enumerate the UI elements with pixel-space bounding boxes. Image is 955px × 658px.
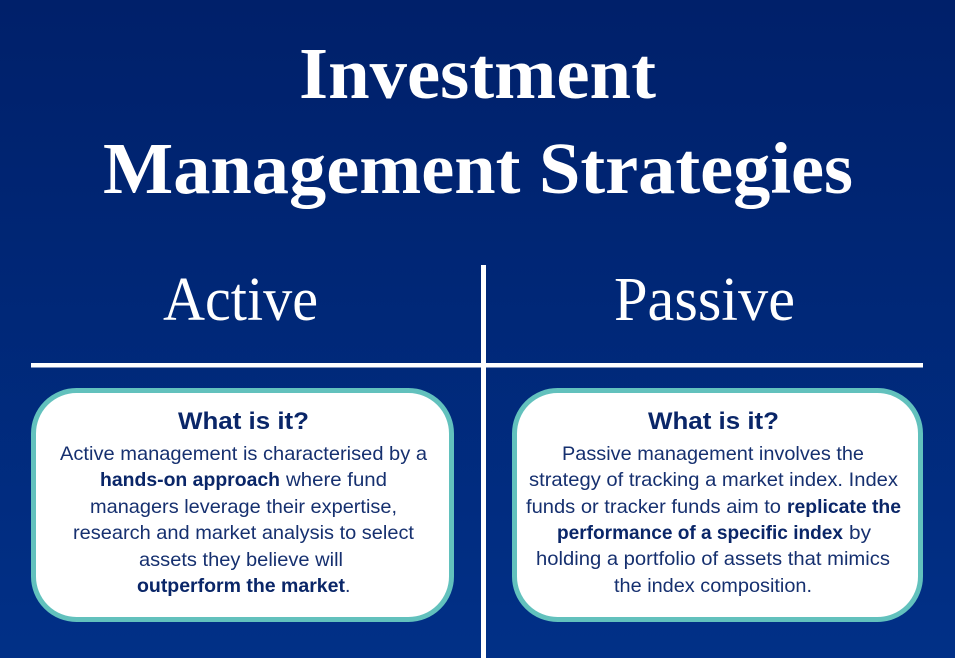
text: active description: assets they believe will xyxy=(139,549,343,571)
text: active description: outperform the market xyxy=(137,575,345,597)
text: active description: where fund xyxy=(285,469,387,491)
title: Management Strategies xyxy=(103,128,853,209)
text: passive description: holding a portfolio of assets that mimics xyxy=(536,548,890,570)
text: passive description: replicate the xyxy=(787,496,901,518)
text: active description xyxy=(60,443,427,597)
text: passive description xyxy=(526,443,901,597)
heading: what is it (passive): What is it? xyxy=(648,408,779,435)
text: passive description: the index composition. xyxy=(614,575,812,597)
text: active description: hands-on approach xyxy=(100,469,280,491)
text: passive description: Passive management involves the xyxy=(562,443,864,465)
panel: active xyxy=(34,390,452,620)
text: passive description: funds or tracker funds aim to xyxy=(526,496,781,518)
text: active description: research and market analysis to select xyxy=(73,522,415,544)
text: passive description: by xyxy=(849,522,871,544)
heading: Passive: Passive xyxy=(614,266,795,334)
text: active description: . xyxy=(345,575,350,597)
heading: what is it (active): What is it? xyxy=(178,408,309,435)
text: active description: Active management is characterised by a xyxy=(60,443,427,465)
text: passive description: strategy of tracking a market index. Index xyxy=(529,469,898,491)
text: active description: managers leverage their expertise, xyxy=(90,496,397,518)
title: Investment xyxy=(299,33,656,114)
text: passive description: performance of a specific index xyxy=(557,522,843,544)
title xyxy=(103,33,853,209)
heading: Active: Active xyxy=(163,266,318,334)
panel: passive xyxy=(514,390,920,620)
